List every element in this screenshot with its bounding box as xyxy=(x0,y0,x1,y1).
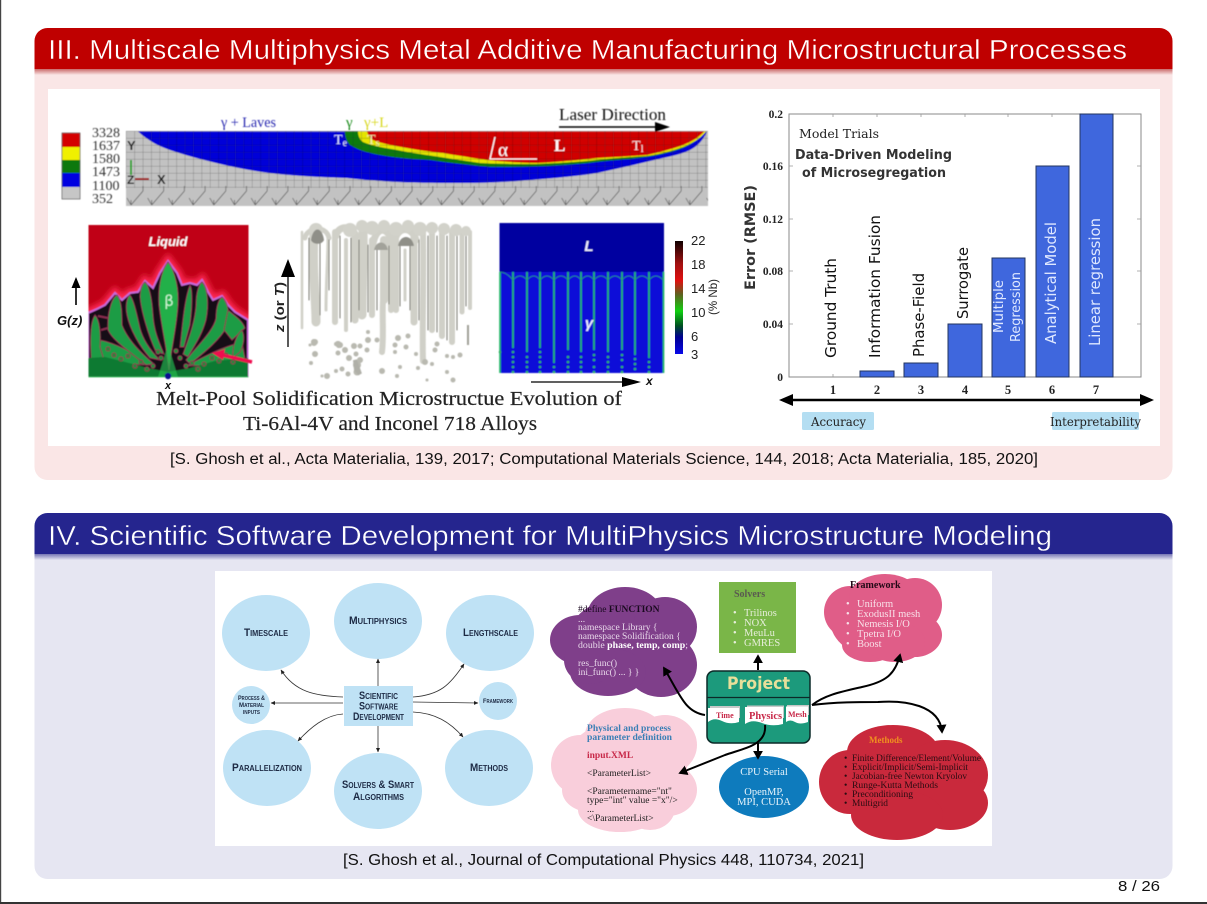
nodes xyxy=(222,583,534,829)
x tick labels: 7 xyxy=(1093,383,1099,397)
cloud: methods: Explicit/Implicit/Semi-Implicit xyxy=(852,763,968,773)
legend: percent Nb colour bar: (% Nb) xyxy=(706,279,720,315)
node labels: Multiphysics xyxy=(349,615,408,627)
labels: melt pool regions: l xyxy=(641,143,644,155)
box: solvers: Solvers xyxy=(734,589,765,600)
node labels: Timescale xyxy=(244,627,289,639)
citation: section IV: [S. Ghosh et al., Journal of Computational Physics 448, 110734, 2021] xyxy=(343,852,864,869)
x tick labels: 6 xyxy=(1049,383,1055,397)
labels: melt pool regions: T xyxy=(334,133,343,148)
caption: melt pool solidification: Ti-6Al-4V and Inconel 718 Alloys xyxy=(243,413,537,435)
label: interpretability: Interpretability xyxy=(1050,415,1141,429)
caption: melt pool solidification xyxy=(156,388,622,435)
ellipse: CPU serial and parallel: OpenMP, xyxy=(744,787,784,798)
cloud: methods: Finite Difference/Element/Volume xyxy=(852,753,981,764)
ellipse: CPU serial and parallel: CPU Serial xyxy=(740,767,788,778)
node labels: Parallelization xyxy=(232,762,302,774)
node labels: Lengthscale xyxy=(463,627,519,639)
box: solvers: • xyxy=(733,628,737,639)
bars xyxy=(860,114,1113,377)
label: G(z) axis xyxy=(57,277,172,392)
labels: melt pool regions: γ+L xyxy=(363,115,388,131)
cloud: methods: • xyxy=(844,781,847,791)
chart annotation: model trials: Model Trials xyxy=(799,126,879,141)
caption: melt pool solidification: Melt-Pool Solidification Microstructue Evolution of xyxy=(156,388,622,410)
y tick labels: 0.16 xyxy=(763,161,783,173)
label: G(z) axis: x xyxy=(164,380,172,392)
legend: temperature scale: 1637 xyxy=(92,139,120,154)
labels: melt pool regions: γ + Laves xyxy=(220,115,276,131)
axis label: z (or T) xyxy=(272,259,295,347)
chart: model trials error bars xyxy=(743,109,1141,397)
diagram: scientific software development hub xyxy=(222,583,534,829)
legend: temperature scale: 1580 xyxy=(92,152,120,167)
label: G(z) axis: G(z) xyxy=(57,313,82,328)
bar labels xyxy=(822,215,1104,358)
heading: section IV: IV. Scientific Software Development for MultiPhysics Microstructure Modeling xyxy=(48,520,1052,551)
node labels: Development xyxy=(353,711,404,723)
bar labels: Multiple xyxy=(992,280,1007,333)
cloud: methods: Preconditioning xyxy=(852,790,913,800)
cloud: framework: Framework xyxy=(850,580,901,591)
cloud: code function: res_func() xyxy=(578,658,617,669)
axis triad: Y xyxy=(127,138,136,153)
y tick labels: 0.08 xyxy=(763,266,783,278)
cloud: physical parameter definition: <ParameterList> xyxy=(587,769,651,779)
labels: melt pool regions: Laser Direction xyxy=(559,105,667,124)
labels: melt pool regions xyxy=(220,105,667,161)
heading: section IV xyxy=(34,513,1172,560)
cloud: framework: • xyxy=(846,609,850,620)
y tick labels xyxy=(763,109,783,384)
image: 3D dendrite isosurface xyxy=(302,220,471,382)
cloud: physical parameter definition: <Parametername="nt" xyxy=(587,787,672,797)
x tick labels: 5 xyxy=(1005,383,1011,397)
cloud: code function: ... xyxy=(578,615,585,625)
box: project xyxy=(707,671,810,743)
bar labels: Information Fusion xyxy=(866,215,884,358)
cloud: framework: • xyxy=(846,639,850,650)
legend: temperature scale: 352 xyxy=(92,192,113,207)
cloud: code function: #define FUNCTION xyxy=(578,604,660,615)
cloud: framework: Uniform xyxy=(857,599,893,610)
node labels: Software xyxy=(359,700,399,712)
legend: temperature scale: 3328 xyxy=(92,126,120,141)
y tick labels: 0.12 xyxy=(763,214,783,226)
arrow: red pointer xyxy=(212,349,252,362)
legend: temperature scale: 1100 xyxy=(92,179,119,194)
label: accuracy: Accuracy xyxy=(810,415,866,429)
box: solvers: NOX xyxy=(744,618,767,629)
cloud: physical parameter definition xyxy=(551,708,697,832)
cloud: physical parameter definition: <\ParameterList> xyxy=(587,814,654,824)
chart annotation: data-driven modeling: Data-Driven Modeling xyxy=(795,148,952,163)
node labels: inputs xyxy=(243,709,261,716)
cloud: physical parameter definition: type="int" value ="x"/> xyxy=(587,796,678,806)
labels: melt pool regions: γ xyxy=(345,115,353,131)
content area: section IV figure xyxy=(215,571,992,846)
cloud: framework: • xyxy=(846,619,850,630)
tab: Time: Time xyxy=(716,711,734,720)
bar labels: Surrogate xyxy=(954,247,972,319)
image: columnar gamma dendrites xyxy=(499,223,664,373)
cloud: physical parameter definition: input.XML xyxy=(587,751,633,761)
x tick labels: 4 xyxy=(962,383,969,397)
legend: percent Nb colour bar: 14 xyxy=(691,281,705,296)
axis triad: Z xyxy=(127,173,134,187)
box: solvers: • xyxy=(733,638,737,649)
labels: melt pool regions: e xyxy=(343,138,348,149)
cloud: methods: Multigrid xyxy=(852,799,888,809)
axis triad: X xyxy=(157,172,166,187)
node labels: Scientific xyxy=(359,690,398,702)
panel: section IV scientific software xyxy=(34,513,1172,879)
cloud: framework: ExodusII mesh xyxy=(857,609,921,620)
tab: Physics: Physics xyxy=(749,711,782,722)
axis triad xyxy=(127,138,166,187)
heading: section III: III. Multiscale Multiphysics Metal Additive Manufacturing Microstructural Processes xyxy=(48,34,1127,65)
cloud: methods: • xyxy=(844,772,847,782)
node labels: Algorithms xyxy=(353,791,405,803)
image: dendrite phase field simulation xyxy=(88,225,252,379)
x tick labels: 2 xyxy=(874,383,880,397)
cloud: methods xyxy=(819,725,988,840)
bar labels: Ground Truth xyxy=(822,258,840,358)
cloud: physical parameter definition: Physical and process xyxy=(587,724,671,734)
chart annotation: data-driven modeling xyxy=(795,148,952,181)
legend: percent Nb colour bar xyxy=(675,233,720,362)
label: accuracy xyxy=(802,412,874,430)
label: gamma: γ xyxy=(585,315,595,332)
label: Liquid: Liquid xyxy=(148,234,189,249)
ellipse: CPU serial and parallel xyxy=(719,756,809,818)
legend: percent Nb colour bar: 6 xyxy=(691,329,698,344)
node labels: Methods xyxy=(470,762,509,774)
heading: section III xyxy=(34,28,1172,75)
cloud: methods: • xyxy=(844,754,847,764)
cloud: framework: Tpetra I/O xyxy=(857,629,901,640)
cloud: code function xyxy=(550,587,697,697)
x tick labels: 1 xyxy=(830,383,836,397)
connector arrows xyxy=(271,659,478,752)
arrows: project connections xyxy=(664,655,942,773)
bar labels: Linear regression xyxy=(1086,218,1104,346)
cloud: code function: namespace Solidification { xyxy=(578,631,681,642)
cloud: code function: double phase, temp, comp ; xyxy=(578,641,688,651)
node labels: Framework xyxy=(483,698,513,705)
arrow: laser direction xyxy=(559,122,670,132)
ellipse: CPU serial and parallel: MPI, CUDA xyxy=(737,797,791,808)
cloud: methods: Runge-Kutta Methods xyxy=(852,781,938,791)
y tick labels: 0 xyxy=(777,372,783,384)
node labels: Solvers & Smart xyxy=(342,779,414,791)
legend: percent Nb colour bar: 22 xyxy=(691,233,705,248)
box: solvers: • xyxy=(733,608,737,619)
legend: percent Nb colour bar: 3 xyxy=(691,347,698,362)
labels: melt pool regions: L xyxy=(554,136,565,155)
cloud: methods: Methods xyxy=(869,735,903,745)
labels: melt pool regions: T xyxy=(367,133,376,148)
box: solvers: GMRES xyxy=(744,638,780,649)
legend: temperature scale xyxy=(62,126,120,207)
x tick labels xyxy=(830,383,1099,397)
arrow: accuracy to interpretability xyxy=(779,394,1154,406)
box: solvers xyxy=(719,582,796,653)
cloud: physical parameter definition: ... xyxy=(587,805,594,815)
cloud: framework: Boost xyxy=(857,639,882,650)
cloud: code function: ini_func() ... } } xyxy=(578,667,639,678)
label: L: L xyxy=(584,238,594,255)
cloud: framework: • xyxy=(846,629,850,640)
bar labels: Regression xyxy=(1009,272,1024,342)
axis label: z (or T): z (or T) xyxy=(272,282,287,333)
node labels: Process & xyxy=(238,695,265,702)
cloud: methods: Jacobian-free Newton Kryolov xyxy=(852,771,967,782)
node labels: Material xyxy=(239,702,264,709)
cloud: physical parameter definition: parameter definition xyxy=(587,733,673,743)
cloud: methods: • xyxy=(844,790,847,800)
panel: section III metal additive manufacturing xyxy=(34,28,1172,480)
page number: 8 / 26 xyxy=(1118,879,1160,895)
legend: percent Nb colour bar: 18 xyxy=(691,257,705,272)
tab: Mesh: Mesh xyxy=(788,710,807,719)
y tick labels: 0.2 xyxy=(769,109,783,121)
legend: temperature scale: 1473 xyxy=(92,165,120,180)
label: beta phase: β xyxy=(164,292,174,310)
bar labels: Analytical Model xyxy=(1042,222,1060,344)
chart: melt pool temperature contour xyxy=(62,105,708,207)
y tick labels: 0.04 xyxy=(763,319,783,331)
bar labels: Phase-Field xyxy=(910,273,928,357)
chart annotation: data-driven modeling: of Microsegregation xyxy=(802,166,946,181)
arrow: x axis: x xyxy=(645,374,654,388)
title: Project: Project xyxy=(727,674,790,694)
cloud: framework: • xyxy=(846,599,850,610)
legend: percent Nb colour bar: 10 xyxy=(691,305,705,320)
labels: melt pool regions: s xyxy=(376,138,380,149)
node labels xyxy=(232,615,519,803)
arrow: growth angle xyxy=(490,137,537,159)
cloud: methods: • xyxy=(844,763,847,773)
labels: melt pool regions: T xyxy=(632,139,641,154)
axis title: Error (RMSE) xyxy=(743,185,759,290)
citation: section III: [S. Ghosh et al., Acta Materialia, 139, 2017; Computational Materials Science, 144, 2018; Acta Materialia, 185, 2020] xyxy=(170,451,1038,468)
arrow: x axis xyxy=(531,374,654,388)
cloud: framework xyxy=(824,574,942,662)
cloud: code function: namespace Library { xyxy=(578,623,657,633)
content area: section III figure xyxy=(48,89,1160,446)
cloud: methods: • xyxy=(844,799,847,809)
box: solvers: MeuLu xyxy=(744,628,776,639)
cloud: framework: Nemesis I/O xyxy=(857,619,910,630)
box: solvers: Trilinos xyxy=(744,608,777,619)
box: solvers: • xyxy=(733,618,737,629)
labels: melt pool regions: α xyxy=(498,140,508,161)
x tick labels: 3 xyxy=(918,383,924,397)
